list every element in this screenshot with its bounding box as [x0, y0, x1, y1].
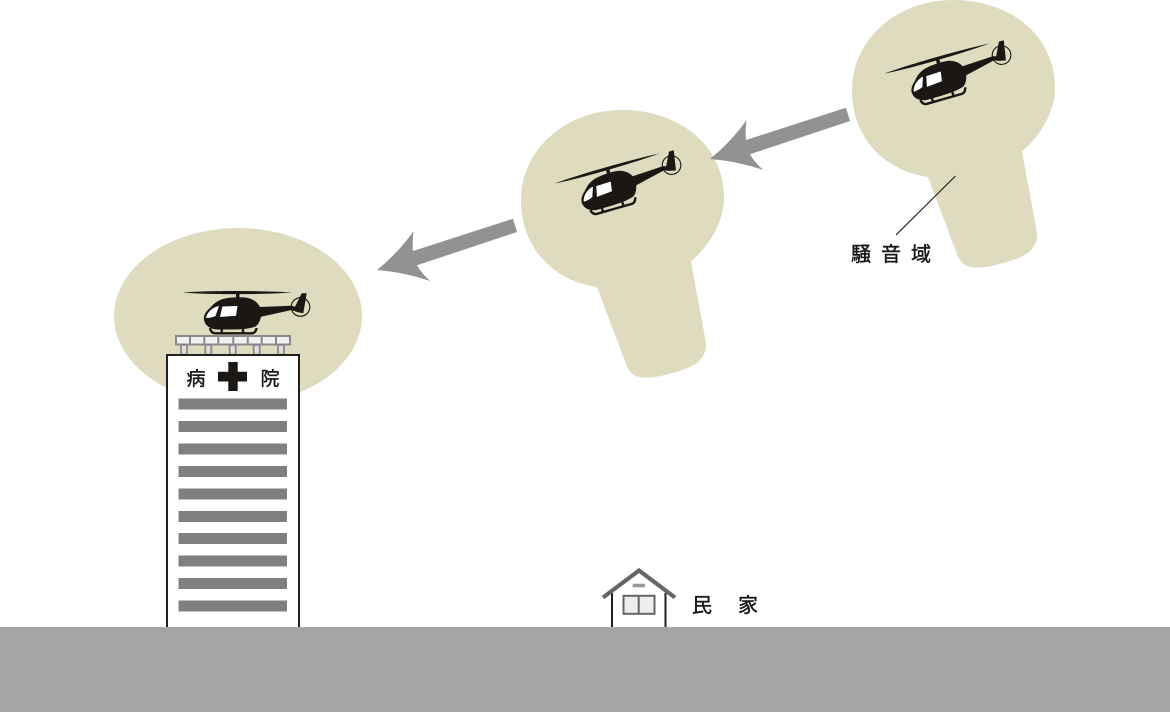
- helicopter: landed: [183, 291, 310, 333]
- building windows: [178, 398, 287, 612]
- ground: [0, 627, 1170, 712]
- label: house: 民家: [692, 594, 784, 617]
- helipad: [176, 336, 290, 354]
- noise zone: middle: [521, 110, 724, 378]
- noise zone: hospital: [114, 228, 362, 404]
- arrow: middle to hospital: [377, 219, 517, 281]
- arrow: upper to middle: [710, 108, 850, 170]
- noise zone: upper: [852, 0, 1055, 268]
- house: [603, 570, 675, 627]
- label: noise zone: 騒音域: [851, 243, 941, 266]
- helicopter: upper: [884, 37, 1018, 113]
- icon: red-cross style plus: [218, 362, 247, 391]
- hospital sign: right character: 院: [260, 368, 280, 390]
- hospital building: [167, 355, 299, 628]
- hospital sign: left character: 病: [186, 368, 206, 390]
- leader line: [896, 176, 956, 235]
- helicopter: middle: [554, 147, 688, 223]
